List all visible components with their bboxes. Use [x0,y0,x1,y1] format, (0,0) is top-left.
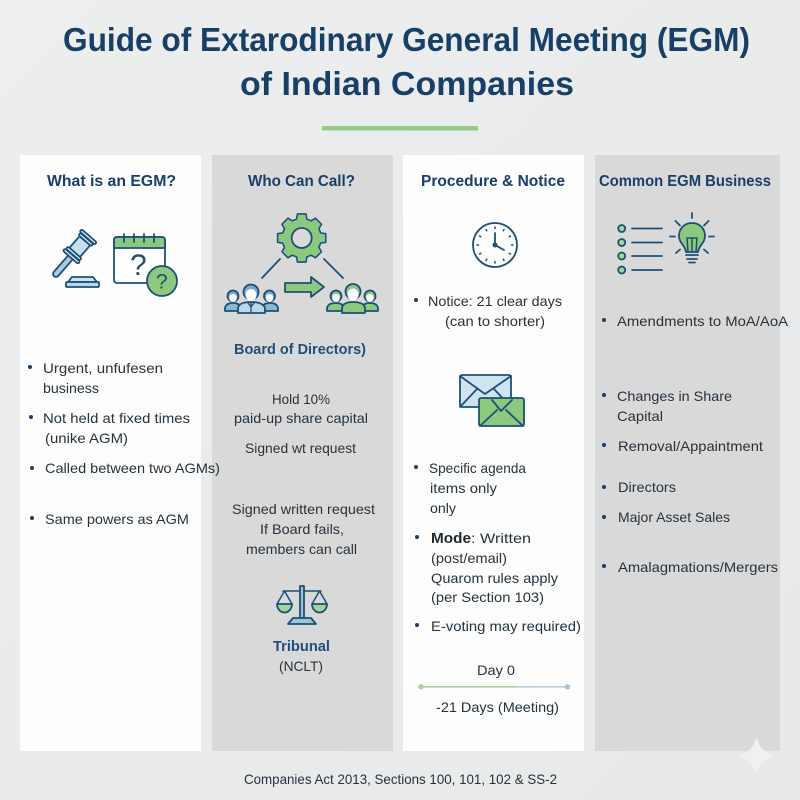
text block: EGM facts: Not held at fixed times [43,410,190,426]
text block: business list: Capital [617,408,663,424]
text block: board failure: Signed written request [232,501,375,517]
icon: scales of justice [277,586,327,624]
icon: calendar with question mark [114,234,177,296]
panel: Procedure & Notice [403,155,584,751]
title accent rule [322,126,478,130]
timeline: Day 0 [477,662,515,678]
arrow: board to members [285,277,324,297]
text block: business list: Removal/Appaintment [618,438,763,454]
icon: checklist [618,225,662,274]
text block: shareholder requisition [234,391,368,456]
text block: notice period [414,293,562,329]
label: Tribunal (NCLT): (NCLT) [279,658,323,674]
text block: EGM facts: Urgent, unfufesen [43,360,163,376]
text block: business list: Amendments to MoA/AoA [617,313,789,329]
text block: board failure [232,501,375,557]
text block: notice period: (can to shorter) [445,313,545,329]
connector lines from gear [262,259,343,278]
text block: agenda and mode: (per Section 103) [431,589,544,605]
icon: calendar with question mark: ? [130,249,147,282]
text block: business list: Amalagmations/Mergers [618,559,778,575]
panel: What is an EGM? [20,155,220,751]
text block: EGM facts: Same powers as AGM [45,511,189,527]
text block: agenda and mode: items only [430,480,497,496]
label: Tribunal (NCLT): Tribunal [273,639,330,655]
text block: EGM facts: Called between two AGMs) [45,460,220,476]
timeline [418,662,570,715]
text block: agenda and mode: (post/email) [431,550,507,566]
text block: EGM facts [28,360,220,527]
text block: agenda and mode [414,460,581,634]
icon: gear [278,214,326,262]
footer citation: Companies Act 2013, Sections 100, 101, 102 & SS-2 [244,771,557,787]
heading: Procedure & Notice: Procedure & Notice [421,173,565,190]
timeline: -21 Days (Meeting) [436,699,559,715]
heading: Who Can Call?: Who Can Call? [248,173,355,190]
icon: envelopes [460,375,524,426]
text block: shareholder requisition: paid-up share capital [234,410,368,426]
text block: business list: Directors [618,479,676,495]
text block: agenda and mode: E-voting may required) [431,618,581,634]
title: Guide of Extarodinary General Meeting (EGM) [63,21,750,58]
icon: members group [327,284,378,313]
text block: shareholder requisition: Signed wt request [245,440,356,456]
icon: light bulb [670,213,714,262]
text block: agenda and mode: : Written [471,530,531,546]
text block: agenda and mode: Quarom rules apply [431,570,558,586]
label: Board of Directors: Board of Directors) [234,342,366,358]
text block: agenda and mode: Mode [431,530,471,547]
text block: EGM facts: (unike AGM) [45,430,128,446]
icon: gavel [47,229,99,287]
text block: shareholder requisition: Hold 10% [272,391,330,407]
text block: business list: Changes in Share [617,388,732,404]
text block: agenda and mode: Specific agenda [429,460,526,476]
text block: business list: Major Asset Sales [618,509,730,525]
icon: clock [473,223,517,267]
sparkle mark [738,737,776,775]
text block: notice period: Notice: 21 clear days [428,293,562,309]
panel: Common EGM Business [595,155,789,751]
text block: business list [602,313,789,575]
icon: calendar with question mark: ? [156,270,168,294]
text block: agenda and mode: only [430,500,456,516]
panel: Who Can Call? [212,155,393,751]
text block: board failure: members can call [246,541,357,557]
text block: board failure: If Board fails, [260,521,344,537]
label: Tribunal (NCLT) [273,639,330,674]
icon: directors group [225,284,278,313]
title [63,21,750,102]
text block: EGM facts: business [43,380,99,396]
heading: Common EGM Business: Common EGM Business [599,173,771,190]
title: of Indian Companies [240,65,574,102]
heading: What is an EGM?: What is an EGM? [47,173,176,190]
